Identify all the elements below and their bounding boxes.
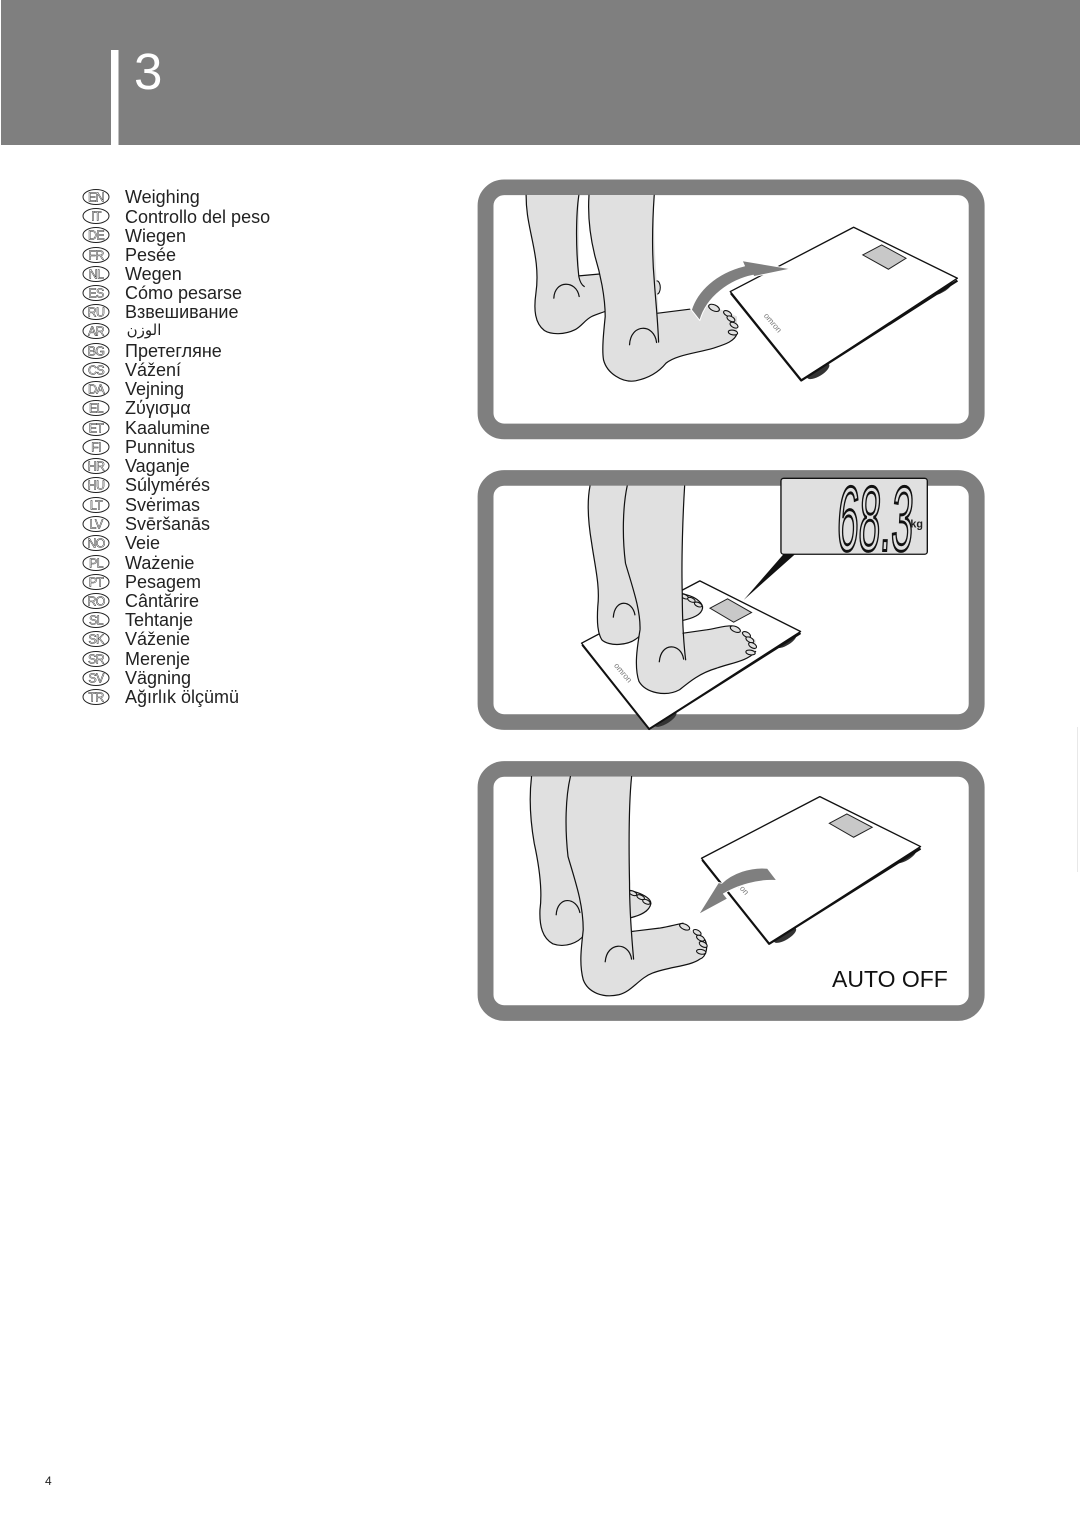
row CS: Vážení bbox=[125, 360, 181, 380]
scale display bbox=[863, 245, 906, 269]
row NO bbox=[83, 533, 160, 553]
row TR: Ağırlık ölçümü bbox=[125, 687, 239, 707]
row PL: Ważenie bbox=[125, 553, 194, 573]
row CS: CS bbox=[88, 364, 104, 378]
row EN bbox=[83, 187, 200, 207]
row PL bbox=[83, 553, 194, 573]
row SV bbox=[83, 668, 191, 688]
arrow: step on bbox=[691, 261, 791, 321]
back leg bbox=[526, 195, 660, 334]
row SR: SR bbox=[88, 652, 105, 666]
row FI: FI bbox=[91, 440, 101, 454]
callout pointer bbox=[744, 553, 796, 600]
row SL: Tehtanje bbox=[125, 610, 193, 630]
row SL bbox=[83, 610, 193, 630]
scale bbox=[730, 227, 957, 382]
row AR bbox=[83, 321, 161, 339]
auto off label: AUTO OFF bbox=[832, 966, 948, 992]
row PT: Pesagem bbox=[125, 572, 201, 592]
row SL: SL bbox=[89, 614, 104, 628]
row ES: Cómo pesarse bbox=[125, 283, 242, 303]
row HR: HR bbox=[88, 460, 105, 474]
scale display bbox=[710, 599, 752, 622]
row RU: RU bbox=[88, 306, 105, 320]
page number: 4 bbox=[45, 1474, 52, 1488]
row LV: LV bbox=[90, 518, 104, 532]
row DA: Vejning bbox=[125, 379, 184, 399]
row EL bbox=[83, 398, 191, 418]
back leg bbox=[530, 777, 651, 945]
row NO: Veie bbox=[125, 533, 160, 553]
row AR: AR bbox=[88, 324, 105, 338]
brand: omron bbox=[612, 661, 634, 684]
row DA bbox=[83, 379, 184, 399]
row RU: Взвешивание bbox=[125, 302, 239, 322]
row EL: EL bbox=[89, 402, 104, 416]
unit: kg bbox=[910, 518, 923, 530]
row LV bbox=[83, 514, 210, 534]
row FI bbox=[83, 437, 195, 457]
row HR: Vaganje bbox=[125, 456, 190, 476]
row PT bbox=[83, 572, 201, 592]
row BG: BG bbox=[88, 344, 104, 358]
row FI: Punnitus bbox=[125, 437, 195, 457]
row DE: Wiegen bbox=[125, 226, 186, 246]
front leg bbox=[589, 195, 739, 381]
row ET bbox=[83, 418, 210, 438]
row NL bbox=[83, 264, 182, 284]
LCD readout bbox=[781, 467, 927, 570]
scale display bbox=[829, 814, 872, 837]
row BG bbox=[83, 341, 222, 361]
row HR bbox=[83, 456, 190, 476]
brand: omron bbox=[762, 311, 784, 334]
row LT: Svėrimas bbox=[125, 495, 200, 515]
row SK: Váženie bbox=[125, 629, 190, 649]
arrow: step off bbox=[698, 868, 777, 915]
brand: ron bbox=[736, 882, 751, 897]
row CS bbox=[83, 360, 181, 380]
weight value: 68.3 bbox=[835, 467, 916, 570]
panel: step on the scale bbox=[486, 187, 977, 431]
row PL: PL bbox=[89, 556, 104, 570]
back leg bbox=[588, 486, 703, 644]
row ES: ES bbox=[88, 286, 104, 300]
panel: step off, auto off bbox=[486, 769, 977, 1013]
row NO: NO bbox=[87, 536, 106, 550]
step number: 3 bbox=[134, 43, 162, 100]
row SK: SK bbox=[88, 632, 105, 646]
row NL: NL bbox=[89, 268, 104, 282]
language list bbox=[83, 187, 270, 707]
row IT: Controllo del peso bbox=[125, 207, 270, 227]
row DA: DA bbox=[88, 382, 105, 396]
row FR: Pesée bbox=[125, 245, 176, 265]
row HU: Súlymérés bbox=[125, 475, 210, 495]
row TR: TR bbox=[88, 690, 104, 704]
row EL: Ζύγισμα bbox=[125, 398, 191, 418]
row AR: الوزن bbox=[127, 321, 161, 339]
row SR: Merenje bbox=[125, 649, 190, 669]
row RO: RO bbox=[87, 594, 106, 608]
row RO bbox=[83, 591, 199, 611]
row SV: SV bbox=[88, 672, 105, 686]
front leg bbox=[623, 486, 758, 693]
front leg bbox=[566, 777, 708, 996]
row HU: HU bbox=[88, 478, 105, 492]
row FR bbox=[83, 245, 176, 265]
row RO: Cântărire bbox=[125, 591, 199, 611]
row NL: Wegen bbox=[125, 264, 182, 284]
row EN: EN bbox=[88, 190, 105, 204]
row ET: Kaalumine bbox=[125, 418, 210, 438]
panel: read the weight bbox=[486, 467, 977, 730]
scale bbox=[582, 581, 801, 730]
row FR: FR bbox=[88, 248, 104, 262]
row SR bbox=[83, 649, 190, 669]
row HU bbox=[83, 475, 210, 495]
scale bbox=[702, 797, 921, 946]
row LV: Svēršanās bbox=[125, 514, 210, 534]
row DE: DE bbox=[88, 228, 104, 242]
row ET: ET bbox=[89, 422, 104, 436]
row DE bbox=[83, 226, 186, 246]
row LT bbox=[83, 495, 200, 515]
row SK bbox=[83, 629, 190, 649]
row LT: LT bbox=[90, 498, 103, 512]
row PT: PT bbox=[89, 576, 104, 590]
row EN: Weighing bbox=[125, 187, 200, 207]
header band bbox=[1, 0, 1080, 145]
row IT: IT bbox=[91, 210, 102, 224]
row SV: Vägning bbox=[125, 668, 191, 688]
row BG: Претегляне bbox=[125, 341, 222, 361]
